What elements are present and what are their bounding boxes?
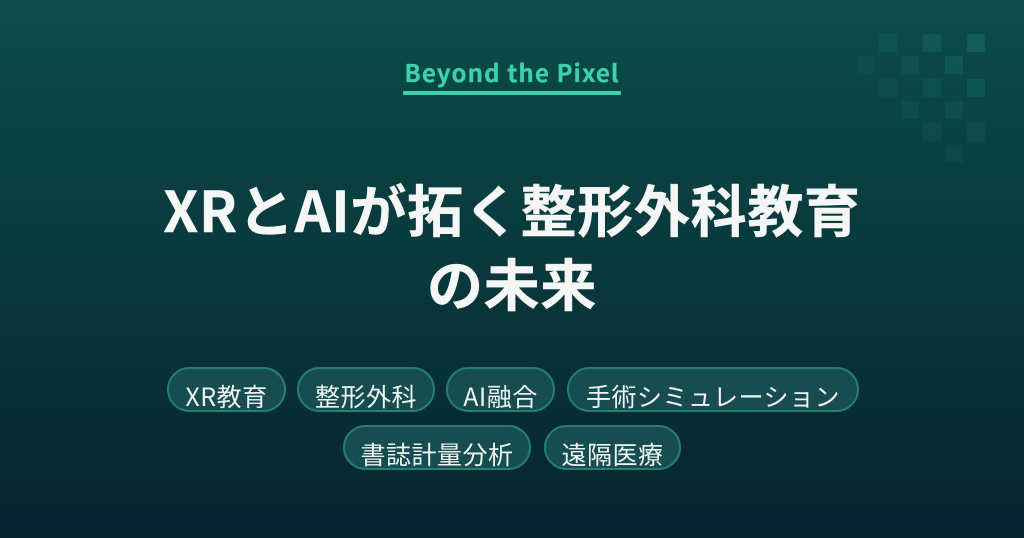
tag: 遠隔医療 — [544, 425, 681, 470]
tag: AI融合: AI融合 — [463, 378, 538, 414]
decorative pixel grid icon — [879, 34, 985, 141]
title — [163, 168, 861, 323]
tag: 整形外科 — [297, 367, 435, 412]
tag group — [167, 367, 859, 472]
eyebrow label: Beyond the Pixel: Beyond the Pixel — [404, 54, 620, 89]
tag: 書誌計量分析 — [343, 425, 531, 470]
tag: AI融合 — [446, 367, 555, 412]
tag: 手術シミュレーション — [567, 367, 859, 412]
title: XRとAIが拓く整形外科教育 — [163, 168, 861, 249]
tag: XR教育: XR教育 — [185, 378, 268, 414]
tag: XR教育 — [167, 367, 286, 412]
tag: 遠隔医療: 遠隔医療 — [561, 436, 664, 472]
tag: 整形外科: 整形外科 — [315, 378, 417, 414]
title: の未来 — [427, 242, 597, 323]
tag: 手術シミュレーション: 手術シミュレーション — [586, 378, 840, 414]
tag: 書誌計量分析: 書誌計量分析 — [360, 436, 514, 472]
